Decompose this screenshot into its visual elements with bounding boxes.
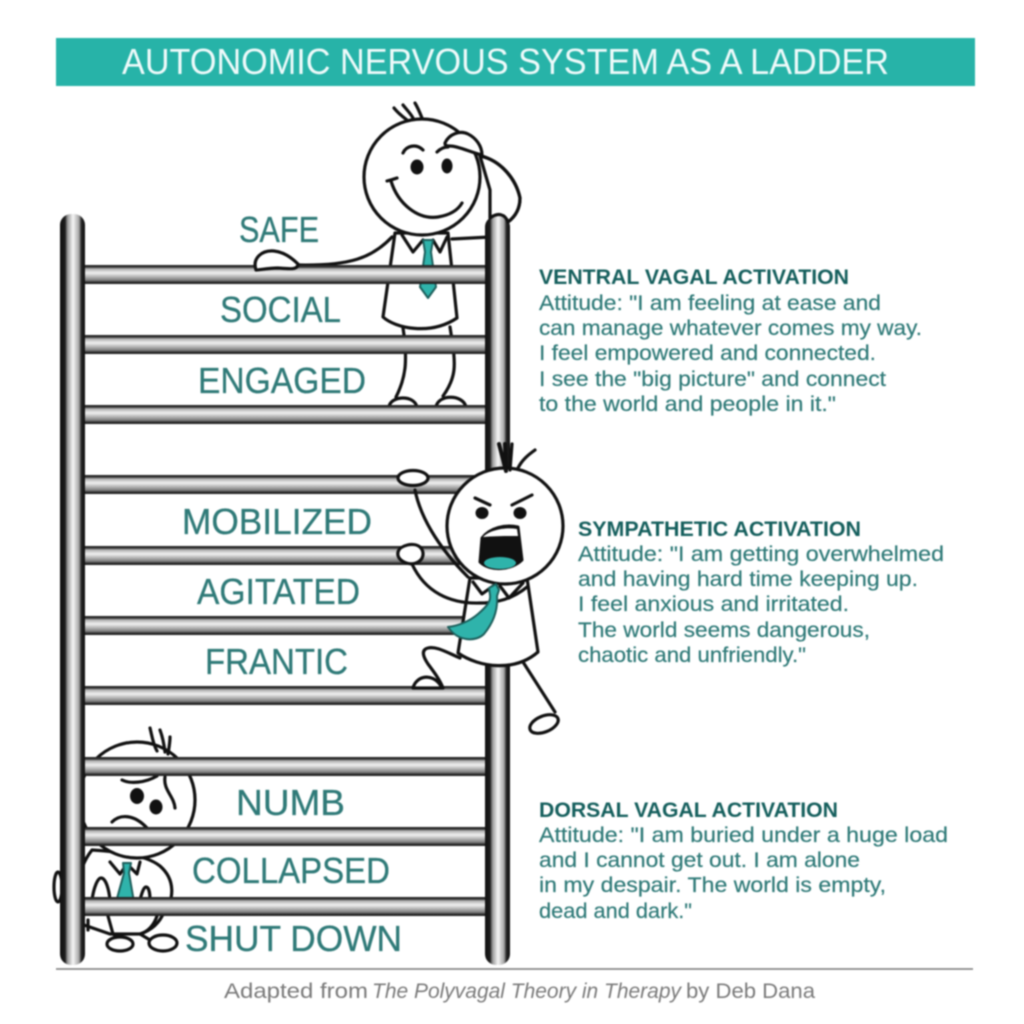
ladder labels: SHUT DOWN — [185, 918, 402, 959]
text block: dorsal vagal activation: dead and dark." — [539, 900, 692, 923]
ladder labels: NUMB — [236, 782, 345, 823]
source credit — [224, 980, 815, 1003]
text block: ventral vagal activation: VENTRAL VAGAL ACTIVATION — [539, 266, 849, 289]
figure: safe smiling stick man behind ladder — [298, 233, 490, 407]
title banner: AUTONOMIC NERVOUS SYSTEM AS A LADDER — [122, 41, 889, 82]
text block: sympathetic activation: chaotic and unfriendly." — [578, 644, 806, 667]
text block: ventral vagal activation: can manage whatever comes my way. — [539, 317, 922, 340]
ladder labels: FRANTIC — [205, 641, 348, 682]
ladder labels: ENGAGED — [198, 360, 366, 401]
figure: agitated stick man climbing — [398, 444, 563, 737]
ladder labels: SOCIAL — [220, 289, 341, 330]
ladder labels: AGITATED — [197, 571, 360, 612]
ladder labels — [182, 209, 402, 959]
source credit: Adapted from — [224, 980, 368, 1003]
text block: dorsal vagal activation: in my despair. The world is empty, — [539, 874, 886, 897]
ladder rungs — [85, 265, 485, 916]
figure: collapsed stick man behind ladder — [54, 728, 195, 951]
text block: ventral vagal activation: I see the "big picture" and connect — [539, 368, 886, 391]
text block: sympathetic activation: Attitude: "I am getting overwhelmed — [578, 543, 944, 566]
text block: ventral vagal activation — [539, 266, 922, 416]
source credit: The Polyvagal Theory in Therapy — [372, 980, 682, 1003]
text block: ventral vagal activation: I feel empowered and connected. — [539, 342, 876, 365]
text block: dorsal vagal activation — [539, 799, 948, 923]
text block: dorsal vagal activation: and I cannot get out. I am alone — [539, 849, 860, 872]
ladder labels: MOBILIZED — [182, 501, 372, 542]
text block: sympathetic activation — [578, 518, 944, 667]
figure: safe stick man head and hands — [255, 103, 520, 270]
ladder rails — [60, 214, 510, 965]
text block: sympathetic activation: The world seems dangerous, — [578, 619, 870, 642]
text block: ventral vagal activation: to the world and people in it." — [539, 393, 836, 416]
text block: dorsal vagal activation: Attitude: "I am buried under a huge load — [539, 824, 948, 847]
ladder labels: SAFE — [239, 209, 319, 250]
text block: sympathetic activation: SYMPATHETIC ACTIVATION — [578, 518, 861, 541]
text block: ventral vagal activation: Attitude: "I am feeling at ease and — [539, 292, 881, 315]
text block: dorsal vagal activation: DORSAL VAGAL ACTIVATION — [539, 799, 838, 822]
ladder labels: COLLAPSED — [192, 850, 390, 891]
text block: sympathetic activation: and having hard time keeping up. — [578, 568, 918, 591]
source credit: by Deb Dana — [686, 980, 815, 1003]
text block: sympathetic activation: I feel anxious and irritated. — [578, 593, 849, 616]
